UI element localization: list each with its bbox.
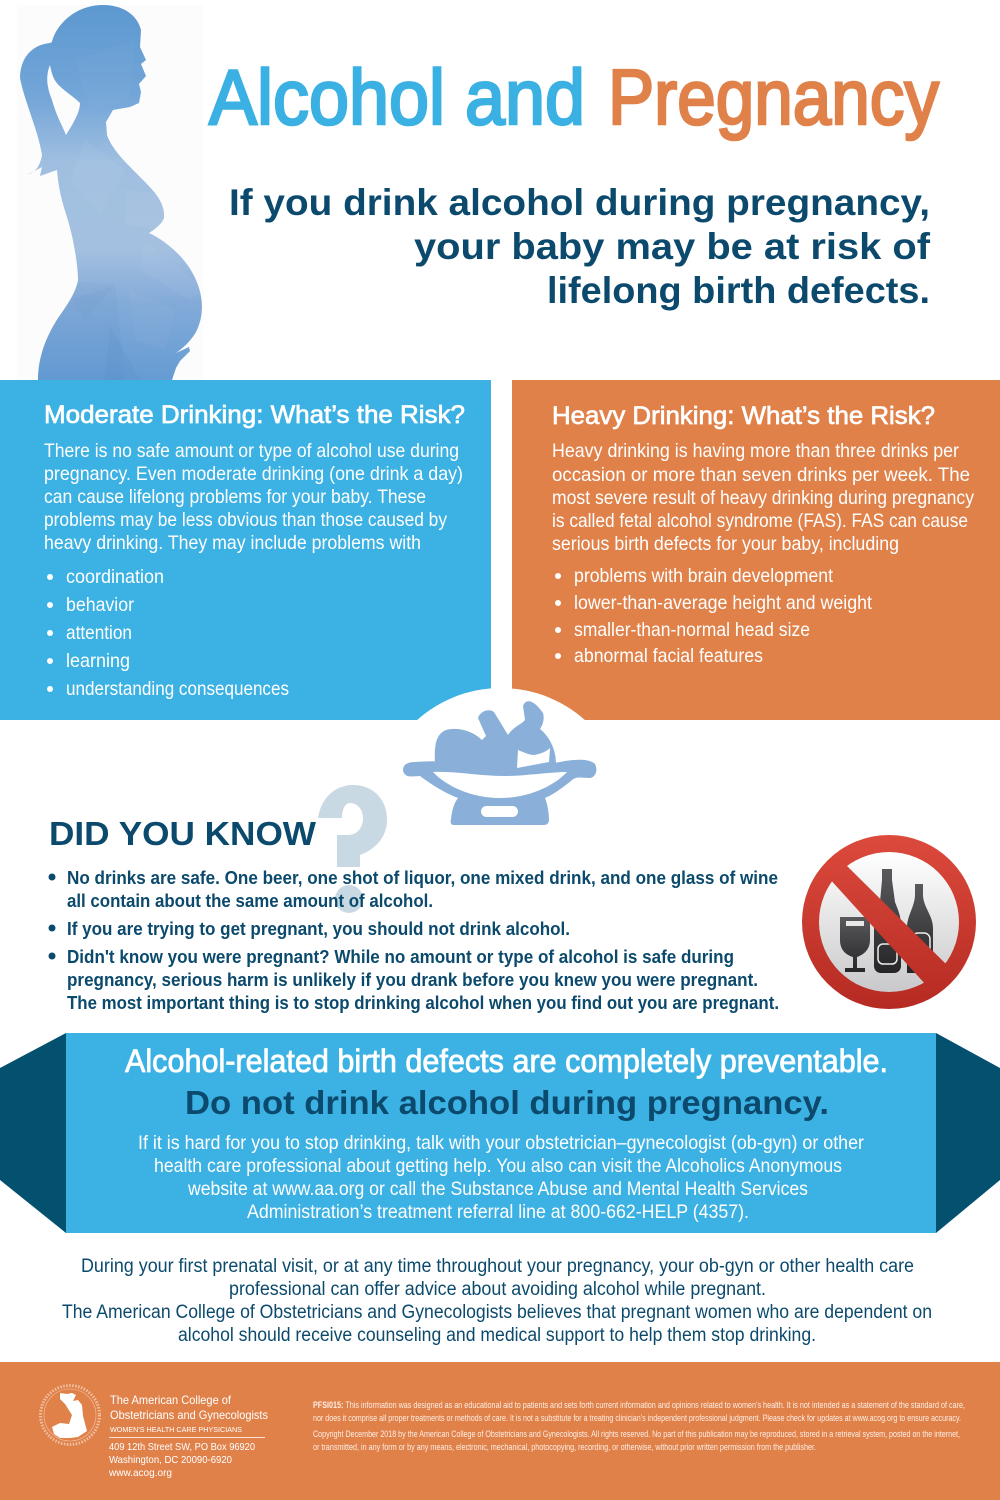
banner body text: Administration’s treatment referral line at 800-662-HELP (4357). [247,1201,749,1223]
banner body text: If it is hard for you to stop drinking, talk with your obstetrician–gynecologist (ob-gyn) or other [138,1132,864,1154]
list: did you know facts [48,867,779,1013]
text: prenatal visit advice: During your first prenatal visit, or at any time throughout your pregnancy, your ob-gyn or other health care [81,1256,914,1277]
subtitle [229,182,931,311]
list: heavy drinking defects [555,565,873,667]
panel: heavy drinking [512,380,1000,720]
title [209,53,939,141]
list: did you know facts: pregnancy, serious harm is unlikely if you drank before you knew you were pregnant. [67,969,758,990]
banner: prevention message [0,1033,1000,1233]
text: heavy drinking description [552,440,974,555]
title: Pregnancy [608,53,939,141]
text: heavy drinking description: Heavy drinking is having more than three drinks per [552,440,959,462]
text: organization name and address: The American College of [110,1393,232,1407]
text: prenatal visit advice: The American College of Obstetricians and Gynecologists believes that pregnant women who are dependent on [62,1302,932,1323]
text: organization name and address: WOMEN'S HEALTH CARE PHYSICIANS [110,1425,242,1434]
list: heavy drinking defects: problems with brain development [574,565,834,587]
title: Alcohol and [209,53,585,141]
text: heavy drinking description: serious birth defects for your baby, including [552,533,899,555]
text: moderate drinking description: There is no safe amount or type of alcohol use during [44,440,459,462]
list: did you know facts: If you are trying to get pregnant, you should not drink alcohol. [67,918,570,939]
text: moderate drinking description: pregnancy. Even moderate drinking (one drink a day) [44,463,463,485]
banner body text: website at www.aa.org or call the Substance Abuse and Mental Health Services [187,1178,808,1200]
banner body text: health care professional about getting help. You also can visit the Alcoholics Anonymous [154,1155,842,1177]
text: legal disclaimer [313,1400,965,1453]
illustration: pregnant woman silhouette [17,5,205,380]
heading: did you know: DID YOU KNOW [49,815,317,852]
text: legal disclaimer: or transmitted, in any form or by any means, electronic, mechanical, photocopying, recording, or otherwise, without prior written permission from the publisher. [313,1442,816,1453]
heading: heavy drinking: Heavy Drinking: What’s the Risk? [552,402,935,430]
banner call to action: Do not drink alcohol during pregnancy. [185,1084,829,1121]
banner headline: Alcohol-related birth defects are completely preventable. [125,1043,888,1079]
list: heavy drinking defects: smaller-than-normal head size [574,619,810,641]
text: prenatal visit advice: professional can offer advice about avoiding alcohol while pregnant. [229,1279,766,1300]
text: moderate drinking description: can cause lifelong problems for your baby. These [44,486,426,508]
text: organization name and address: www.acog.org [108,1467,172,1479]
logo: ACOG seal [40,1386,100,1444]
list: moderate drinking problems: coordination [66,566,164,588]
text: moderate drinking description: problems may be less obvious than those caused by [44,509,447,531]
text: organization name and address: 409 12th Street SW, PO Box 96920 [109,1441,255,1453]
icon: baby on scale [403,701,596,825]
panel: moderate drinking [0,380,491,720]
text: organization name and address [108,1393,268,1479]
icon: question mark [318,785,387,913]
list: did you know facts: Didn't know you were pregnant? While no amount or type of alcohol is safe during [67,946,734,967]
subtitle: lifelong birth defects. [547,270,930,311]
list: moderate drinking problems: learning [66,650,130,672]
text: organization name and address: Obstetricians and Gynecologists [110,1408,268,1422]
list: moderate drinking problems: understanding consequences [66,678,289,700]
list: heavy drinking defects: abnormal facial features [574,645,763,667]
subtitle: your baby may be at risk of [414,226,931,267]
list: moderate drinking problems: attention [66,622,132,644]
icon: no alcohol sign [802,835,976,1009]
list: did you know facts: all contain about the same amount of alcohol. [67,890,433,911]
text: heavy drinking description: occasion or more than seven drinks per week. The [552,464,970,486]
list: did you know facts: No drinks are safe. One beer, one shot of liquor, one mixed drink, and one glass of wine [67,867,778,888]
subtitle: If you drink alcohol during pregnancy, [229,182,930,223]
list: moderate drinking problems [47,566,289,700]
white circle notch [375,688,627,940]
list: heavy drinking defects: lower-than-average height and weight [574,592,873,614]
text: moderate drinking description: heavy drinking. They may include problems with [44,532,421,554]
heading: moderate drinking: Moderate Drinking: What’s the Risk? [44,401,465,429]
list: did you know facts: The most important thing is to stop drinking alcohol when you find out you are pregnant. [67,992,779,1013]
footer [0,1362,1000,1500]
banner body text [138,1132,864,1223]
text: prenatal visit advice: alcohol should receive counseling and medical support to help them stop drinking. [178,1325,816,1346]
text: organization name and address: Washington, DC 20090-6920 [109,1454,232,1466]
text: moderate drinking description [44,440,463,554]
list: moderate drinking problems: behavior [66,594,134,616]
text: prenatal visit advice [62,1256,932,1346]
